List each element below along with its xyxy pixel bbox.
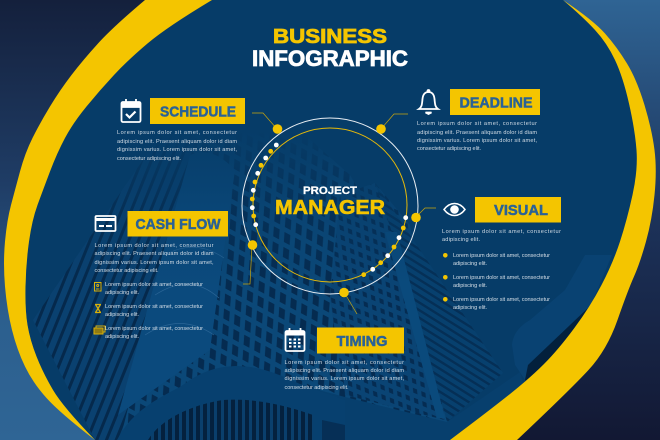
icon: address book <box>94 282 101 291</box>
body text <box>94 243 214 274</box>
building: fade toward top <box>106 0 564 248</box>
background: left side <box>0 0 330 440</box>
body text: adipiscing elit. Praesent aliquam dolor id diam <box>284 368 404 374</box>
body text: dignissim varius. Lorem ipsum dolor sit amet, <box>284 376 404 382</box>
building: rounded facade ribs <box>145 247 224 336</box>
icon list text: Lorem ipsum dolor sit amet, consectetur <box>105 304 203 310</box>
icon list text: adipiscing elit. <box>105 334 139 340</box>
body text <box>417 121 537 152</box>
inner ring <box>253 128 407 282</box>
building: main tower <box>124 152 447 426</box>
panel: schedule <box>117 98 245 162</box>
icon list text: adipiscing elit. <box>105 312 139 318</box>
icon: bell <box>419 90 438 114</box>
body text: dignissim varius. Lorem ipsum dolor sit amet, <box>94 260 214 266</box>
heading box <box>150 98 245 124</box>
body text: adipiscing elit. <box>442 237 480 243</box>
panel: timing <box>284 328 404 391</box>
icon list text: Lorem ipsum dolor sit amet, consectetur <box>105 326 203 332</box>
yellow band: right <box>450 0 656 440</box>
heading: SCHEDULE <box>160 104 236 120</box>
small white beads <box>250 143 408 272</box>
body text: Lorem ipsum dolor sit amet, consectetur <box>284 360 404 366</box>
building: striped lower facade <box>148 400 313 440</box>
building: dark slot <box>525 306 590 382</box>
icon: calendar check <box>122 99 140 122</box>
icon list text <box>105 282 203 340</box>
heading: CASH FLOW <box>136 216 221 233</box>
icon list text: Lorem ipsum dolor sit amet, consectetur <box>105 282 203 288</box>
title <box>252 26 408 71</box>
body text: adipiscing elit. Praesent aliquam dolor id diam <box>417 130 537 136</box>
body text: consectetur adipiscing elit. <box>94 268 159 274</box>
center label <box>275 185 385 219</box>
icon: photos <box>94 326 105 334</box>
icon list text: adipiscing elit. <box>105 290 139 296</box>
icon: hourglass <box>95 304 101 312</box>
building: curved roof <box>117 366 310 440</box>
building: right tower <box>330 183 445 420</box>
body text: Lorem ipsum dolor sit amet, consectetur <box>94 243 214 249</box>
body text: consectetur adipiscing elit. <box>284 385 349 391</box>
body text: dignissim varius. Lorem ipsum dolor sit amet, <box>417 138 537 144</box>
heading box <box>450 89 540 115</box>
heading: TIMING <box>336 333 388 350</box>
icon: card <box>96 216 116 231</box>
body text: Lorem ipsum dolor sit amet, consectetur <box>417 121 537 127</box>
background: right side <box>330 0 660 440</box>
node dots <box>248 124 421 297</box>
panel: cash flow <box>94 211 228 340</box>
building: small right block <box>512 255 612 380</box>
icon: calendar grid <box>286 328 304 351</box>
body text <box>284 360 404 391</box>
icon: eye <box>444 204 465 216</box>
building: rounded facade <box>118 152 235 415</box>
heading box <box>475 197 561 222</box>
title: BUSINESS <box>273 26 387 48</box>
bullet list: Lorem ipsum dolor sit amet, consectetur <box>453 297 550 303</box>
heading: VISUAL <box>494 202 548 219</box>
panel: visual <box>442 197 561 311</box>
building: right facade <box>375 183 503 422</box>
title: INFOGRAPHIC <box>252 46 408 71</box>
body text: consectetur adipiscing elit. <box>117 156 181 162</box>
heading: DEADLINE <box>460 94 532 112</box>
building: flat plate lower right <box>312 383 523 440</box>
body text: adipiscing elit. Praesent aliquam dolor id diam <box>94 251 214 257</box>
building: left wing <box>35 165 186 440</box>
bullet list: Lorem ipsum dolor sit amet, consectetur <box>453 275 550 281</box>
body text: Lorem ipsum dolor sit amet, consectetur <box>117 130 237 136</box>
outer ring <box>242 118 418 294</box>
body text <box>442 229 561 243</box>
building: tower spine <box>385 232 445 418</box>
body text: consectetur adipiscing elit. <box>417 146 481 152</box>
heading box <box>317 328 404 354</box>
yellow band: left <box>4 0 212 440</box>
small yellow beads <box>250 149 406 277</box>
body text: Lorem ipsum dolor sit amet, consectetur <box>442 229 561 235</box>
bullet list: adipiscing elit. <box>453 261 487 267</box>
connector lines <box>243 113 436 314</box>
bullet list: Lorem ipsum dolor sit amet, consectetur <box>453 253 550 259</box>
body text: dignissim varius. Lorem ipsum dolor sit amet, <box>117 147 237 153</box>
body text: adipiscing elit. Praesent aliquam dolor id diam <box>117 139 237 145</box>
bullet list: adipiscing elit. <box>453 305 487 311</box>
body text <box>117 130 237 162</box>
bullet list: adipiscing elit. <box>453 283 487 289</box>
center label: PROJECT <box>303 185 357 197</box>
heading box <box>128 211 228 236</box>
building: lower right window block <box>322 420 345 440</box>
panel: deadline <box>417 89 540 152</box>
center label: MANAGER <box>275 196 385 219</box>
bullet list <box>443 253 550 311</box>
center diagram <box>242 113 436 314</box>
